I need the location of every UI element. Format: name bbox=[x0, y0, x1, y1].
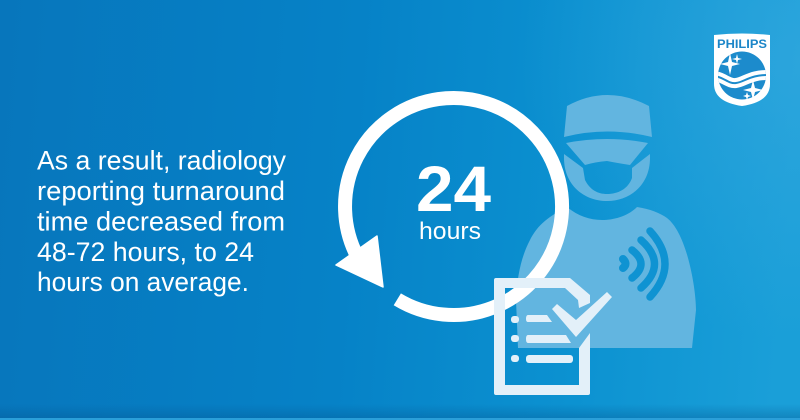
globe bbox=[718, 52, 766, 100]
Philips logo bbox=[714, 34, 772, 106]
icon: wireless signal bbox=[623, 231, 665, 297]
stars bbox=[720, 53, 763, 100]
list row three bbox=[511, 355, 573, 363]
body text: 48-72 hours, to 24 bbox=[37, 237, 254, 267]
arrowhead bbox=[336, 236, 383, 287]
arc bbox=[345, 98, 562, 315]
icon: radiologist bbox=[516, 95, 696, 348]
check mark bbox=[552, 292, 612, 337]
document outline bbox=[494, 278, 590, 395]
list row two bbox=[511, 335, 571, 343]
circular arrow bbox=[336, 98, 562, 315]
shield bbox=[714, 34, 770, 106]
body text: reporting turnaround bbox=[37, 176, 285, 206]
face mask bbox=[564, 154, 650, 201]
wordmark: PHILIPS bbox=[717, 39, 767, 51]
body text: As a result, radiology bbox=[37, 146, 287, 176]
icon: checklist document bbox=[494, 278, 612, 395]
forehead band bbox=[566, 139, 648, 165]
waves bbox=[714, 75, 772, 83]
unit label: hours bbox=[419, 218, 481, 245]
list row one bbox=[511, 315, 552, 323]
body text bbox=[37, 146, 287, 297]
body text: hours on average. bbox=[37, 267, 249, 297]
body text: time decreased from bbox=[37, 206, 285, 236]
surgical cap bbox=[564, 95, 652, 137]
torso bbox=[516, 207, 696, 348]
big number: 24 bbox=[416, 153, 491, 225]
